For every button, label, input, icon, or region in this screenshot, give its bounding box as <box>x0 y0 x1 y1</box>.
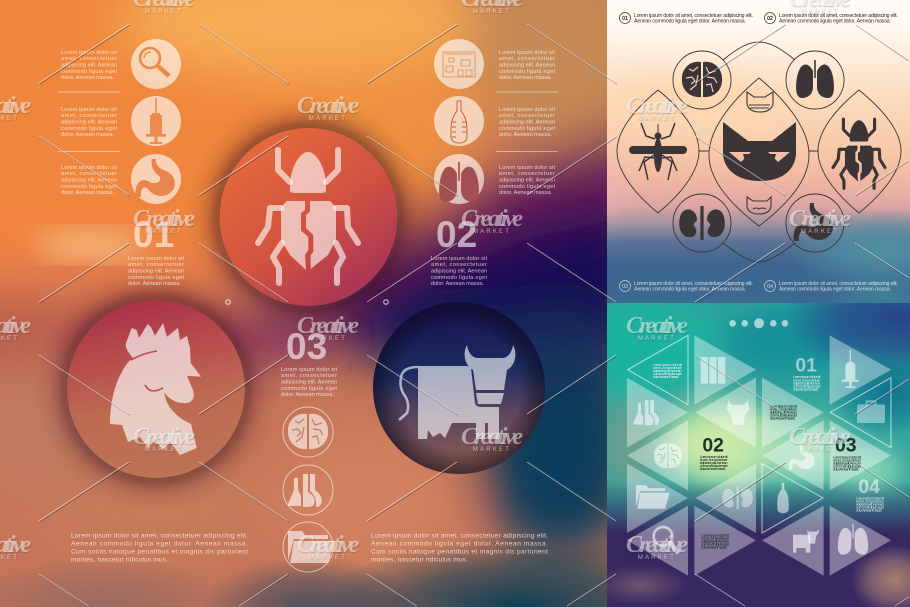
text block: 01: dolor. Aenean massa. <box>128 281 181 287</box>
text block: triangle bottom: commodo ligula eget <box>701 541 730 546</box>
paragraph: bottom right: Lorem ipsum dolor sit amet, consectetuer adipiscing elit. <box>371 532 548 540</box>
text block: 03: adipiscing elit. Aenean <box>281 380 337 386</box>
text block: 02: amet, consectetuer <box>431 262 487 268</box>
overlay: Creative Market watermarks: MARKET <box>473 229 511 235</box>
text block: triangle middle: adipiscing elit. Aenean <box>770 410 797 415</box>
divider <box>58 92 558 152</box>
icon: folder <box>288 531 334 563</box>
overlay: Creative Market watermarks: Creative <box>297 532 359 558</box>
overlay: Creative Market watermarks: MARKET <box>309 555 347 561</box>
text block: left 2: amet, consectetuer <box>61 113 117 119</box>
background: teal, green and purple blur <box>607 303 910 607</box>
icon: thermometer <box>451 101 467 143</box>
circle: rooster <box>64 297 248 481</box>
text block: left 3: commodo ligula eget <box>61 184 117 190</box>
text block: right 2 <box>499 107 555 138</box>
icon: small cow <box>793 529 819 553</box>
paragraph: bottom left: Cum sociis natoque penatibus et magnis dis parturient <box>71 548 248 556</box>
text block: triangle top left: amet, consectetuer <box>653 365 682 370</box>
text block: right 2: adipiscing elit. Aenean <box>499 120 555 126</box>
note 03: 03 <box>622 284 628 290</box>
text block 04: amet, consectetuer <box>856 499 885 504</box>
number 02: 02 <box>436 214 477 255</box>
number 03: 03 <box>286 326 327 367</box>
icon: binders <box>701 357 725 384</box>
icon: thermometer <box>777 483 789 513</box>
text block: triangle top left: commodo ligula eget <box>653 371 683 376</box>
text block: left 2: commodo ligula eget <box>61 126 117 132</box>
text block: left 3: adipiscing elit. Aenean <box>61 178 117 184</box>
text block: triangle bottom: amet, consectetuer <box>701 535 730 540</box>
text block: left 1: commodo ligula eget <box>61 69 117 75</box>
icon: beetle <box>833 119 885 188</box>
organ diagram outlines <box>617 42 901 262</box>
note 02 <box>764 12 898 24</box>
paragraph: bottom right: Aenean commodo ligula eget dolor. Aenean massa. <box>371 540 548 548</box>
note 03: Aenean commodo ligula eget dolor. Aenean massa. <box>634 286 746 292</box>
icon: flasks <box>633 400 659 425</box>
paragraph: bottom left <box>71 532 248 564</box>
text block 01: Lorem ipsum dolor sit <box>793 374 821 379</box>
icon: cow <box>399 345 515 439</box>
text block 03: Lorem ipsum dolor sit <box>833 455 862 460</box>
note 03 <box>620 280 753 292</box>
overlay: Creative Market watermarks: Creative <box>297 313 359 339</box>
note 01: Lorem ipsum dolor sit amet, consectetuer adipiscing elit. <box>634 13 753 19</box>
icon: folder <box>636 485 670 509</box>
text block 03: adipiscing elit. Aenean <box>833 461 861 466</box>
number 01: 01 <box>795 355 817 376</box>
note 04: Lorem ipsum dolor sit amet, consectetuer adipiscing elit. <box>779 281 898 287</box>
text block 01: commodo ligula eget <box>793 383 821 388</box>
text block: triangle middle: commodo ligula eget <box>770 413 798 418</box>
text block: triangle top left <box>653 362 683 379</box>
number 03: 03 <box>835 435 857 456</box>
text block: right 3: dolor. Aenean massa. <box>499 190 552 196</box>
text block 03: commodo ligula eget <box>833 464 862 469</box>
text block: right 3 <box>499 165 555 196</box>
text block: right 3: adipiscing elit. Aenean <box>499 178 555 184</box>
note 01 <box>620 12 753 24</box>
text block: 02: adipiscing elit. Aenean <box>431 268 487 274</box>
icon: brain <box>654 444 682 468</box>
text block: left 1: Lorem ipsum dolor sit <box>61 50 117 56</box>
icon: stomach <box>794 203 833 241</box>
text block: left 1 <box>61 50 117 81</box>
text block: right 1 <box>499 50 555 81</box>
text block: left 2: adipiscing elit. Aenean <box>61 120 117 126</box>
text block 02: commodo ligula eget <box>700 463 729 468</box>
text block: 02 <box>431 256 487 287</box>
overlay: Creative Market watermarks: Creative <box>133 424 195 450</box>
overlay: Creative Market watermarks: MARKET <box>801 9 839 15</box>
note 02: Aenean commodo ligula eget dolor. Aenean massa. <box>779 18 891 24</box>
overlay: Creative Market watermarks: Creative <box>789 206 851 232</box>
overlay: Creative Market watermarks: Creative <box>297 93 359 119</box>
triangle grid <box>627 335 891 576</box>
text block: right 2: commodo ligula eget <box>499 126 555 132</box>
text block: triangle top left: Lorem ipsum dolor sit <box>653 362 683 367</box>
overlay: Creative Market watermarks: MARKET <box>801 447 839 453</box>
overlay: Creative Market watermarks: Creative <box>626 313 688 339</box>
overlay: Creative Market watermarks: MARKET <box>801 229 839 235</box>
paragraph: bottom left: Aenean commodo ligula eget dolor. Aenean massa. <box>71 540 248 548</box>
overlay: Creative Market watermarks: Creative <box>461 424 523 450</box>
text block: left 2: dolor. Aenean massa. <box>61 132 114 138</box>
icon: magnifier <box>654 527 679 553</box>
icon list: bottom column <box>283 407 334 572</box>
note 02: 02 <box>767 16 773 22</box>
panel: teal triangles infographic <box>560 300 910 607</box>
text block: 03: Lorem ipsum dolor sit <box>281 367 337 373</box>
text block: 03: amet, consectetuer <box>281 373 337 379</box>
text block: triangle top left: dolor. Aenean massa. <box>653 374 679 379</box>
overlay: Creative Market watermarks: MARKET <box>145 9 183 15</box>
overlay: Creative Market watermarks: MARKET <box>473 447 511 453</box>
panel: orange blurred infographic <box>0 0 650 607</box>
overlay: Creative Market watermarks: MARKET <box>309 336 347 342</box>
text block: 01: commodo ligula eget <box>128 275 184 281</box>
background: main blurred gradient <box>0 0 607 607</box>
text block: left 1: adipiscing elit. Aenean <box>61 62 117 68</box>
text block: right 1: adipiscing elit. Aenean <box>499 62 555 68</box>
text block: triangle top left: adipiscing elit. Aenean <box>653 368 682 373</box>
text block: triangle middle: dolor. Aenean massa. <box>770 416 795 421</box>
text block 01: amet, consectetuer <box>793 377 821 382</box>
text block: left 3 <box>61 165 117 196</box>
note 04: Aenean commodo ligula eget dolor. Aenean massa. <box>779 286 891 292</box>
icon: stomach <box>789 445 815 470</box>
text block 02: dolor. Aenean massa. <box>700 466 726 471</box>
note 01: Aenean commodo ligula eget dolor. Aenean massa. <box>634 18 746 24</box>
note 03: Lorem ipsum dolor sit amet, consectetuer adipiscing elit. <box>634 281 753 287</box>
text block: left 2 <box>61 107 117 138</box>
overlay: Creative Market watermarks: Creative <box>626 93 688 119</box>
paragraph: bottom left: Lorem ipsum dolor sit amet, consectetuer adipiscing elit. <box>71 532 248 540</box>
text block: triangle middle: amet, consectetuer <box>770 407 798 412</box>
text block: 02: dolor. Aenean massa. <box>431 281 484 287</box>
overlay: Creative Market watermarks: MARKET <box>145 447 183 453</box>
text block 04: adipiscing elit. Aenean <box>856 502 884 507</box>
text block: triangle bottom: dolor. Aenean massa. <box>701 544 727 549</box>
overlay: Creative Market watermarks: Creative <box>133 206 195 232</box>
text block 03: amet, consectetuer <box>833 458 862 463</box>
text block: right 3: amet, consectetuer <box>499 171 555 177</box>
text block: 01: adipiscing elit. Aenean <box>128 268 184 274</box>
panel: light blurred organ diagram <box>588 0 910 303</box>
decorative small ring <box>226 300 230 304</box>
number 04: 04 <box>858 477 880 498</box>
text block: triangle bottom: Lorem ipsum dolor sit <box>701 532 730 537</box>
overlay: Creative Market watermarks: Creative <box>626 532 688 558</box>
text block: right 3: Lorem ipsum dolor sit <box>499 165 555 171</box>
overlay: Creative Market watermarks: MARKET <box>309 116 347 122</box>
text block: triangle middle <box>770 404 798 421</box>
text block 04: commodo ligula eget <box>856 505 885 510</box>
text block: left 2: Lorem ipsum dolor sit <box>61 107 117 113</box>
outlined triangles <box>628 335 891 533</box>
text block: 03: commodo ligula eget <box>281 386 337 392</box>
text block 01: dolor. Aenean massa. <box>793 386 819 391</box>
note 01: 01 <box>622 16 628 22</box>
overlay: Creative Market watermarks: MARKET <box>145 229 183 235</box>
dots row <box>729 318 788 328</box>
note 04: 04 <box>767 284 773 290</box>
icon list: right column <box>434 39 484 204</box>
text block: 02: commodo ligula eget <box>431 275 487 281</box>
text block 02: adipiscing elit. Aenean <box>700 460 728 465</box>
note 04 <box>764 280 898 292</box>
icon: brain <box>682 62 722 97</box>
icon: rooster <box>110 323 201 455</box>
icon: lungs <box>796 60 834 98</box>
text block: 03: dolor. Aenean massa. <box>281 392 334 398</box>
text block: right 1: dolor. Aenean massa. <box>499 75 552 81</box>
text block: 02: Lorem ipsum dolor sit <box>431 256 487 262</box>
text block: right 1: commodo ligula eget <box>499 69 555 75</box>
icon: flasks <box>288 474 322 507</box>
overlay: Creative Market watermarks: MARKET <box>473 9 511 15</box>
icon: cat face outline top <box>747 92 773 112</box>
icon: stomach <box>136 159 175 197</box>
text block: right 3: commodo ligula eget <box>499 184 555 190</box>
text block: right 2: amet, consectetuer <box>499 113 555 119</box>
icon: cat head <box>723 122 796 181</box>
circle: beetle <box>216 125 400 309</box>
text block: triangle bottom <box>701 532 730 549</box>
text block: right 1: Lorem ipsum dolor sit <box>499 50 555 56</box>
icon: syringe <box>146 98 166 144</box>
text block: left 3: Lorem ipsum dolor sit <box>61 165 117 171</box>
text block: 01: amet, consectetuer <box>128 262 184 268</box>
overlay: Creative Market watermarks: Creative <box>461 206 523 232</box>
icon: syringe <box>842 350 859 388</box>
icon: briefcase <box>857 400 885 423</box>
text block: triangle bottom: adipiscing elit. Aenean <box>701 538 729 543</box>
icon: kidneys <box>722 487 753 509</box>
text block 04: dolor. Aenean massa. <box>856 508 882 513</box>
number 01: 01 <box>133 214 174 255</box>
text block: 01: Lorem ipsum dolor sit <box>128 256 184 262</box>
text block 02: amet, consectetuer <box>700 457 728 462</box>
icon: cat face outline bottom <box>747 197 771 214</box>
text block: left 1: dolor. Aenean massa. <box>61 75 114 81</box>
decorative small ring <box>384 300 388 304</box>
text block: 03 <box>281 367 337 398</box>
icon: flow chart <box>443 52 475 77</box>
icon: magnifier <box>140 48 169 76</box>
text block 02: Lorem ipsum dolor sit <box>700 454 729 459</box>
icon: cow head <box>726 395 750 425</box>
icon: lungs <box>838 524 868 555</box>
text block 03: dolor. Aenean massa. <box>833 467 859 472</box>
overlay: Creative Market watermarks: MARKET <box>638 116 676 122</box>
circle: cow <box>373 302 545 474</box>
text block 03 <box>833 455 862 472</box>
text block: left 3: amet, consectetuer <box>61 171 117 177</box>
text block: right 2: Lorem ipsum dolor sit <box>499 107 555 113</box>
text block: left 3: dolor. Aenean massa. <box>61 190 114 196</box>
background: peach to blue gradient <box>607 4 910 303</box>
text block: 01 <box>128 256 184 287</box>
icon list: left column <box>131 39 181 204</box>
overlay: Creative Market watermarks: Creative <box>789 424 851 450</box>
paragraph: bottom right: montes, nascetur ridiculus mus. <box>371 556 468 564</box>
paragraph: bottom right <box>371 532 548 564</box>
text block: left 1: amet, consectetuer <box>61 56 117 62</box>
paragraph: bottom left: montes, nascetur ridiculus mus. <box>71 556 168 564</box>
icon: brain <box>288 414 328 449</box>
icon: lungs <box>439 162 479 202</box>
overlay: Creative Market watermarks: MARKET <box>638 336 676 342</box>
icon: beetle <box>258 150 358 283</box>
note 02: Lorem ipsum dolor sit amet, consectetuer adipiscing elit. <box>779 13 898 19</box>
icon: kidneys <box>679 206 725 240</box>
text block: right 1: amet, consectetuer <box>499 56 555 62</box>
text block 02 <box>700 454 729 471</box>
paragraph: bottom right: Cum sociis natoque penatibus et magnis dis parturient <box>371 548 548 556</box>
filled triangles <box>627 335 891 576</box>
number 02: 02 <box>702 435 724 456</box>
icon: mosquito <box>629 123 687 180</box>
text block 01 <box>793 374 821 391</box>
overlay: Creative Market watermarks: MARKET <box>638 555 676 561</box>
text block: triangle middle: Lorem ipsum dolor sit <box>770 404 798 409</box>
text block 04 <box>856 496 885 513</box>
text block: right 2: dolor. Aenean massa. <box>499 132 552 138</box>
text block 01: adipiscing elit. Aenean <box>793 380 820 385</box>
text block 04: Lorem ipsum dolor sit <box>856 496 885 501</box>
